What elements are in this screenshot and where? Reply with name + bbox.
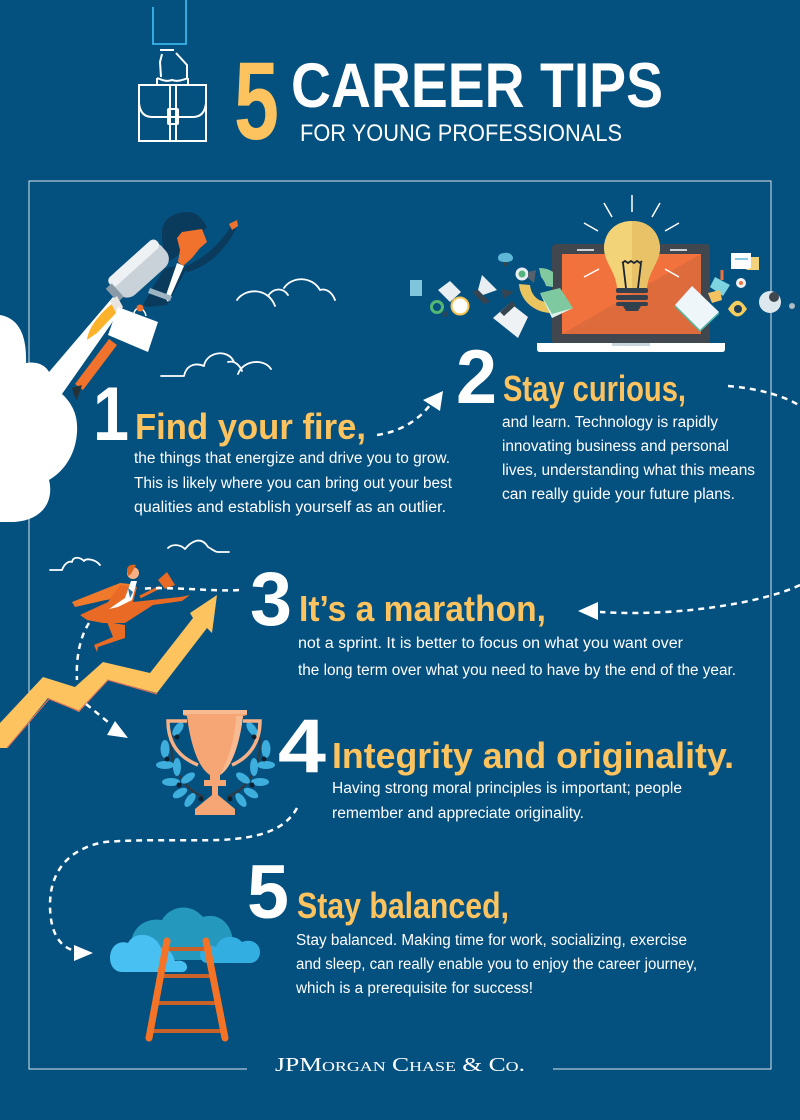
illustration: laptop with light bulb	[537, 195, 725, 352]
step 2: can really guide your future plans.	[502, 486, 735, 503]
step 4: Integrity and originality.	[332, 735, 734, 776]
step 5	[247, 850, 697, 997]
step 1: qualities and establish yourself as an outlier.	[134, 499, 446, 516]
step 3: 3	[250, 557, 292, 642]
step 5: Stay balanced. Making time for work, socializing, exercise	[296, 932, 687, 949]
step 1: Find your fire,	[135, 406, 366, 447]
step 4: remember and appreciate originality.	[332, 805, 584, 822]
illustration: clouds and ladder	[110, 907, 260, 1038]
illustration: jetpack woman	[72, 212, 238, 400]
step 3	[250, 557, 736, 679]
illustration: running businessman	[72, 565, 190, 652]
illustration: rising yellow arrow	[0, 595, 217, 748]
icons: floating tech symbols	[410, 253, 795, 338]
step 2: 2	[456, 335, 497, 420]
step 5: and sleep, can really enable you to enjoy the career journey,	[296, 956, 697, 973]
step 1: This is likely where you can bring out your best	[134, 475, 453, 492]
arrow: 1 to 2	[377, 391, 443, 435]
step 5: Stay balanced,	[297, 885, 509, 926]
step 2	[456, 335, 755, 503]
cloud outline lower	[161, 353, 271, 376]
cloud outline left	[50, 558, 100, 570]
title: CAREER TIPS	[291, 51, 663, 121]
step 5: which is a prerequisite for success!	[295, 980, 533, 997]
step 1: the things that energize and drive you to grow.	[134, 450, 450, 467]
title: 5	[234, 40, 279, 163]
step 3: not a sprint. It is better to focus on what you want over	[298, 635, 683, 652]
step 1	[93, 372, 453, 516]
arrow: 2 to 3	[578, 386, 800, 620]
cloud outline top	[237, 279, 335, 306]
title	[234, 40, 663, 163]
step 3: the long term over what you need to have by the end of the year.	[298, 662, 736, 679]
arrow: 3 dotted path	[77, 588, 239, 738]
step 2: innovating business and personal	[502, 438, 729, 455]
footer logo: JPMorgan Chase & Co.	[275, 1054, 525, 1076]
step 2: Stay curious,	[503, 368, 686, 409]
step 4: Having strong moral principles is important; people	[332, 780, 682, 797]
cloud outline right	[168, 541, 229, 552]
icon: briefcase with hand	[139, 0, 206, 141]
title: FOR YOUNG PROFESSIONALS	[300, 120, 622, 147]
step 1: 1	[93, 372, 129, 457]
step 4	[278, 704, 734, 822]
step 2: and learn. Technology is rapidly	[502, 414, 718, 431]
step 5: 5	[247, 850, 289, 935]
step 3: It’s a marathon,	[299, 588, 546, 629]
arrow: 4 to 5	[50, 808, 297, 961]
step 4: 4	[278, 704, 326, 789]
step 2: lives, understanding what this means	[502, 462, 755, 479]
illustration: trophy with laurel	[156, 710, 275, 815]
illustration: white smoke cloud	[0, 297, 123, 522]
